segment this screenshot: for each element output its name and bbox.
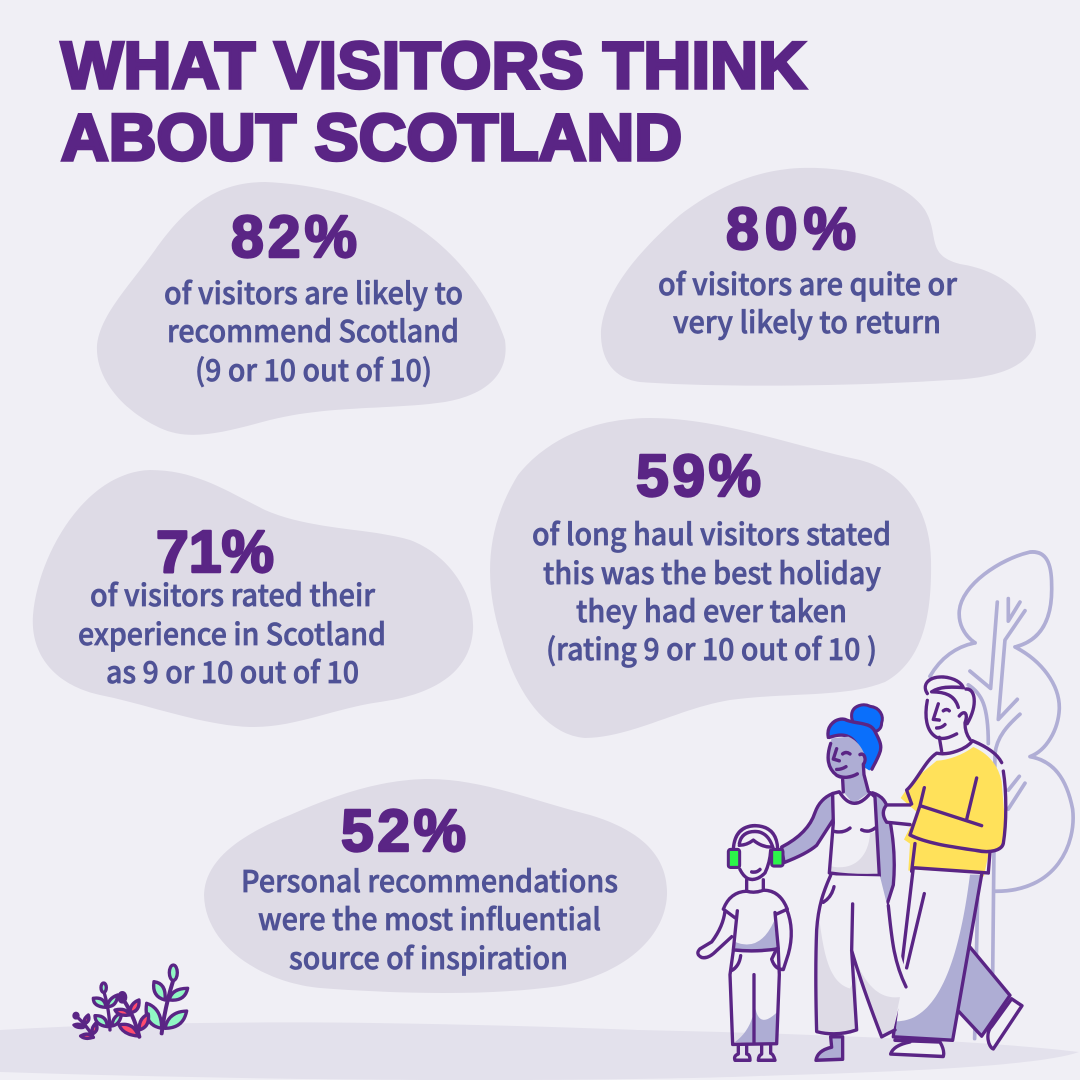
figure: woman: [782, 705, 907, 1060]
panel: 52% stat: source of inspiration: [289, 934, 568, 978]
child arms: [698, 911, 732, 958]
title: ABOUT SCOTLAND: [61, 100, 682, 174]
panel: 80% stat: of visitors are quite or: [658, 260, 958, 304]
woman hair: [828, 705, 882, 770]
panel: 59% stat: [490, 418, 931, 738]
woman skin: [828, 737, 870, 804]
panel: 82% stat: (9 or 10 out of 10): [195, 346, 432, 390]
panel: 71% stat: of visitors rated their: [90, 571, 376, 615]
panel: 80% stat: 80%: [726, 196, 856, 262]
panel: 52% stat: Personal recommendations: [241, 857, 618, 901]
man head: [926, 695, 963, 738]
panel: 71% stat: experience in Scotland: [78, 610, 386, 654]
man sweater: [901, 747, 1005, 878]
panel: 71% stat: as 9 or 10 out of 10: [106, 648, 359, 692]
panel: 82% stat: recommend Scotland: [167, 307, 459, 351]
woman arms: [782, 794, 833, 863]
panel: 59% stat: this was the best holiday: [543, 549, 881, 593]
figure: man: [891, 677, 1022, 1056]
panel: 82% stat: 82%: [231, 204, 357, 270]
ground: [0, 1022, 1079, 1080]
panel: 71% stat: [33, 470, 473, 727]
panel: 71% stat: 71%: [156, 519, 274, 585]
title: [61, 28, 806, 174]
panel: 59% stat: 59%: [636, 443, 761, 509]
figure: child: [698, 826, 791, 1060]
illustration: family and tree: [698, 552, 1073, 1060]
panel: 59% stat: they had ever taken: [576, 587, 847, 631]
icon: tree: [930, 552, 1073, 1039]
man hand on shoulder: [883, 805, 910, 825]
panel: 59% stat: (rating 9 or 10 out of 10 ): [546, 625, 877, 669]
title: WHAT VISITORS THINK: [61, 28, 806, 102]
man outlines: [907, 741, 1002, 804]
child trousers: [735, 1006, 777, 1044]
panel: 59% stat: of long haul visitors stated: [532, 510, 891, 554]
panel: 82% stat: of visitors are likely to: [164, 269, 463, 313]
panel: 52% stat: [204, 779, 667, 993]
panel: 82% stat: [97, 182, 506, 435]
woman top: [829, 792, 879, 875]
man far leg: [958, 947, 1010, 1036]
child shirt: [735, 921, 777, 950]
child headphones: [728, 849, 783, 867]
icon: plants: [74, 965, 188, 1038]
panel: 80% stat: very likely to return: [673, 298, 941, 342]
child head: [733, 826, 778, 849]
panel: 80% stat: [601, 168, 1036, 386]
woman trousers: [816, 875, 907, 1037]
panel: 52% stat: 52%: [341, 798, 466, 864]
panel: 52% stat: were the most influential: [258, 895, 601, 939]
man trousers: [893, 869, 988, 1040]
